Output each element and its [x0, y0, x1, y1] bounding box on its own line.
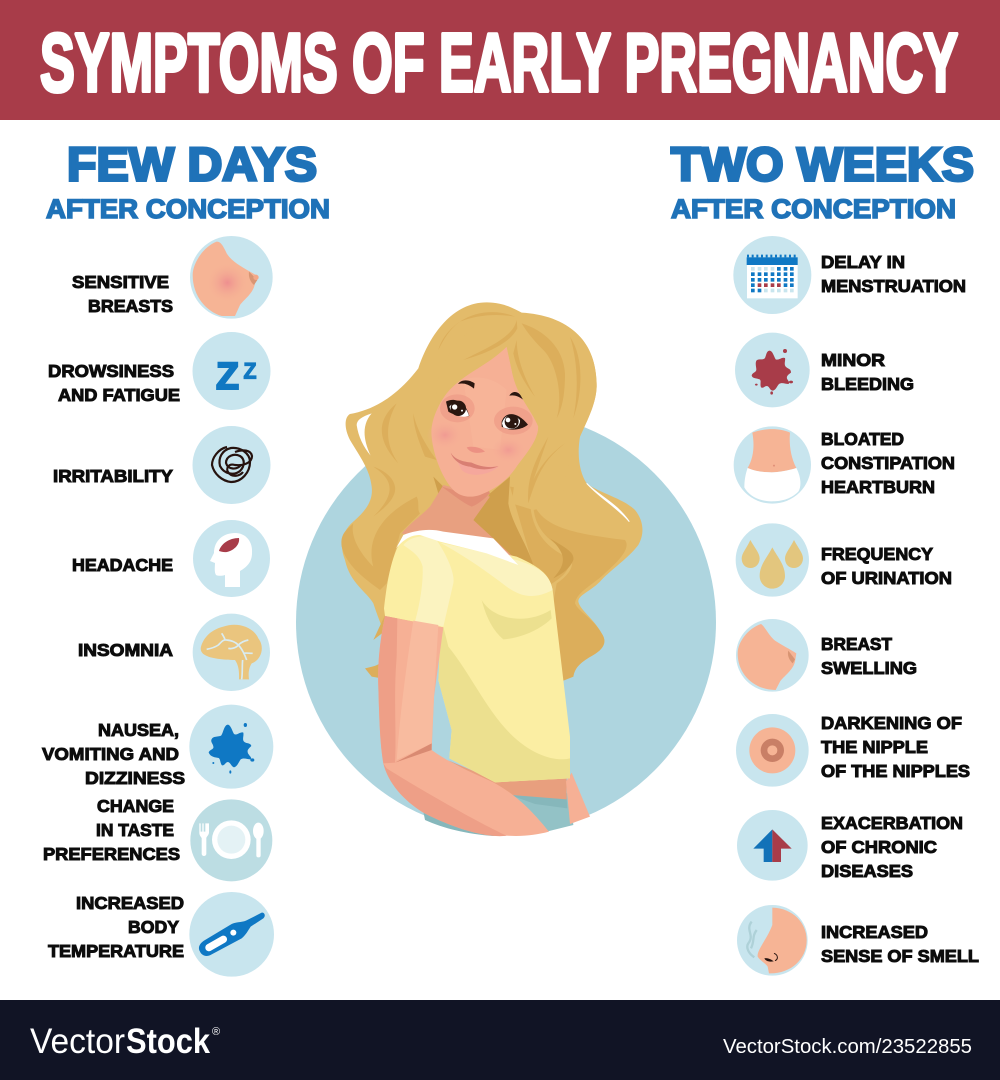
item: drowsiness and fatigue — [48, 332, 270, 410]
icon: thermometer — [189, 892, 274, 977]
item: increased sense of smell — [737, 905, 979, 976]
shirt highlights — [403, 536, 454, 627]
item: increased sense of smell: INCREASED — [821, 922, 928, 942]
item: exacerbation of chronic diseases: DISEASES — [821, 861, 913, 881]
item: change in taste preferences — [43, 796, 272, 881]
eyes — [446, 400, 469, 416]
item: exacerbation of chronic diseases — [737, 810, 963, 881]
item: headache: HEADACHE — [72, 555, 173, 575]
item: sensitive breasts — [72, 236, 273, 319]
item: insomnia — [78, 614, 270, 691]
icon: brain — [193, 614, 270, 691]
icon: nose smelling — [737, 905, 808, 976]
item: increased body temperature: INCREASED — [76, 893, 184, 913]
icon: red splash — [735, 333, 810, 407]
icon: sleeping Zz — [192, 332, 270, 410]
eyebrows — [458, 380, 475, 389]
item: drowsiness and fatigue: AND FATIGUE — [58, 385, 180, 405]
item: nausea, vomiting and dizziness: NAUSEA, — [98, 720, 179, 740]
image id: VectorStock.com/23522855 — [723, 1036, 972, 1058]
item: frequency of urination: OF URINATION — [821, 568, 952, 588]
icon: swollen breast — [736, 619, 809, 692]
heading: two weeks after conception — [671, 138, 974, 224]
item: minor bleeding: MINOR — [821, 350, 885, 370]
VectorStock logo: ® — [212, 1026, 220, 1038]
item: sensitive breasts: BREASTS — [88, 296, 173, 316]
heading: two weeks after conception: TWO WEEKS — [671, 138, 974, 190]
item: headache — [72, 520, 270, 597]
item: breast swelling: BREAST — [821, 634, 892, 654]
VectorStock logo — [30, 1022, 220, 1061]
icon: belly — [734, 426, 811, 504]
item: insomnia: INSOMNIA — [78, 640, 173, 660]
hair back — [342, 302, 642, 681]
heading: few days after conception — [46, 138, 330, 224]
item: frequency of urination: FREQUENCY — [821, 544, 933, 564]
icon: sleeping Zz: Z — [216, 356, 239, 398]
hand at hip — [566, 773, 590, 824]
item: change in taste preferences: IN TASTE — [96, 820, 174, 840]
pants — [508, 790, 573, 832]
item: frequency of urination — [736, 523, 952, 597]
nose and mouth — [467, 447, 485, 453]
item: delay in menstruation — [733, 236, 966, 314]
item: minor bleeding: BLEEDING — [821, 374, 914, 394]
item: increased sense of smell: SENSE OF SMELL — [821, 946, 979, 966]
item: increased body temperature — [48, 892, 274, 977]
woman figure — [341, 302, 642, 836]
item: increased body temperature: BODY — [128, 917, 179, 937]
shirt body — [384, 533, 570, 782]
item: delay in menstruation: MENSTRUATION — [821, 276, 966, 296]
icon: nipple — [736, 714, 809, 787]
left column: symptoms in first days — [42, 236, 274, 977]
icon: rising arrow — [737, 810, 808, 881]
item: irritability: IRRITABILITY — [53, 466, 173, 486]
icon: breast with redness — [190, 236, 273, 319]
VectorStock logo: Stock — [126, 1022, 210, 1061]
belly — [447, 760, 567, 799]
item: exacerbation of chronic diseases: EXACERBATION — [821, 813, 963, 833]
item: darkening of the nipple: THE NIPPLE — [821, 737, 928, 757]
icon: blue splash — [189, 705, 273, 789]
item: change in taste preferences: PREFERENCES — [43, 844, 180, 864]
icon: plate and cutlery — [190, 799, 272, 881]
item: nausea, vomiting and dizziness: VOMITING AND — [42, 744, 179, 764]
item: bloated constipation heartburn: HEARTBURN — [821, 477, 935, 497]
item: nausea, vomiting and dizziness: DIZZINESS — [85, 768, 185, 788]
item: bloated constipation heartburn — [734, 426, 955, 504]
item: breast swelling — [736, 619, 917, 692]
right column: symptoms at two weeks — [733, 236, 979, 976]
icon: sleeping Zz: Z — [244, 358, 256, 384]
arm — [378, 616, 549, 836]
icon: tangled scribble — [192, 426, 270, 504]
item: nausea, vomiting and dizziness — [42, 705, 273, 789]
icon: three drops — [736, 523, 809, 597]
item: breast swelling: SWELLING — [821, 658, 917, 678]
central illustration: woman in circle — [296, 302, 716, 836]
heading: few days after conception: FEW DAYS — [67, 138, 317, 190]
header banner — [0, 0, 1000, 120]
icon: head with red spot — [193, 520, 270, 597]
footer watermark bar — [0, 1000, 1000, 1080]
VectorStock logo: Vector — [30, 1022, 125, 1061]
item: change in taste preferences: CHANGE — [97, 796, 174, 816]
item: bloated constipation heartburn: BLOATED — [821, 429, 904, 449]
hair front — [437, 314, 517, 403]
item: darkening of the nipple — [736, 713, 970, 787]
item: drowsiness and fatigue: DROWSINESS — [48, 361, 174, 381]
item: minor bleeding — [735, 333, 914, 407]
shirt collar — [396, 530, 518, 565]
neck and chest — [402, 485, 517, 560]
item: delay in menstruation: DELAY IN — [821, 252, 905, 272]
icon: calendar — [733, 236, 811, 314]
hair highlights — [357, 413, 372, 456]
item: sensitive breasts: SENSITIVE — [72, 272, 169, 292]
face — [431, 347, 538, 497]
heading: two weeks after conception: AFTER CONCEPTION — [671, 194, 956, 224]
item: irritability — [53, 426, 270, 504]
item: darkening of the nipple: DARKENING OF — [821, 713, 962, 733]
heading: few days after conception: AFTER CONCEPTION — [46, 194, 330, 224]
item: exacerbation of chronic diseases: OF CHRONIC — [821, 837, 937, 857]
item: increased body temperature: TEMPERATURE — [48, 941, 184, 961]
item: bloated constipation heartburn: CONSTIPATION — [821, 453, 955, 473]
item: darkening of the nipple: OF THE NIPPLES — [821, 761, 970, 781]
